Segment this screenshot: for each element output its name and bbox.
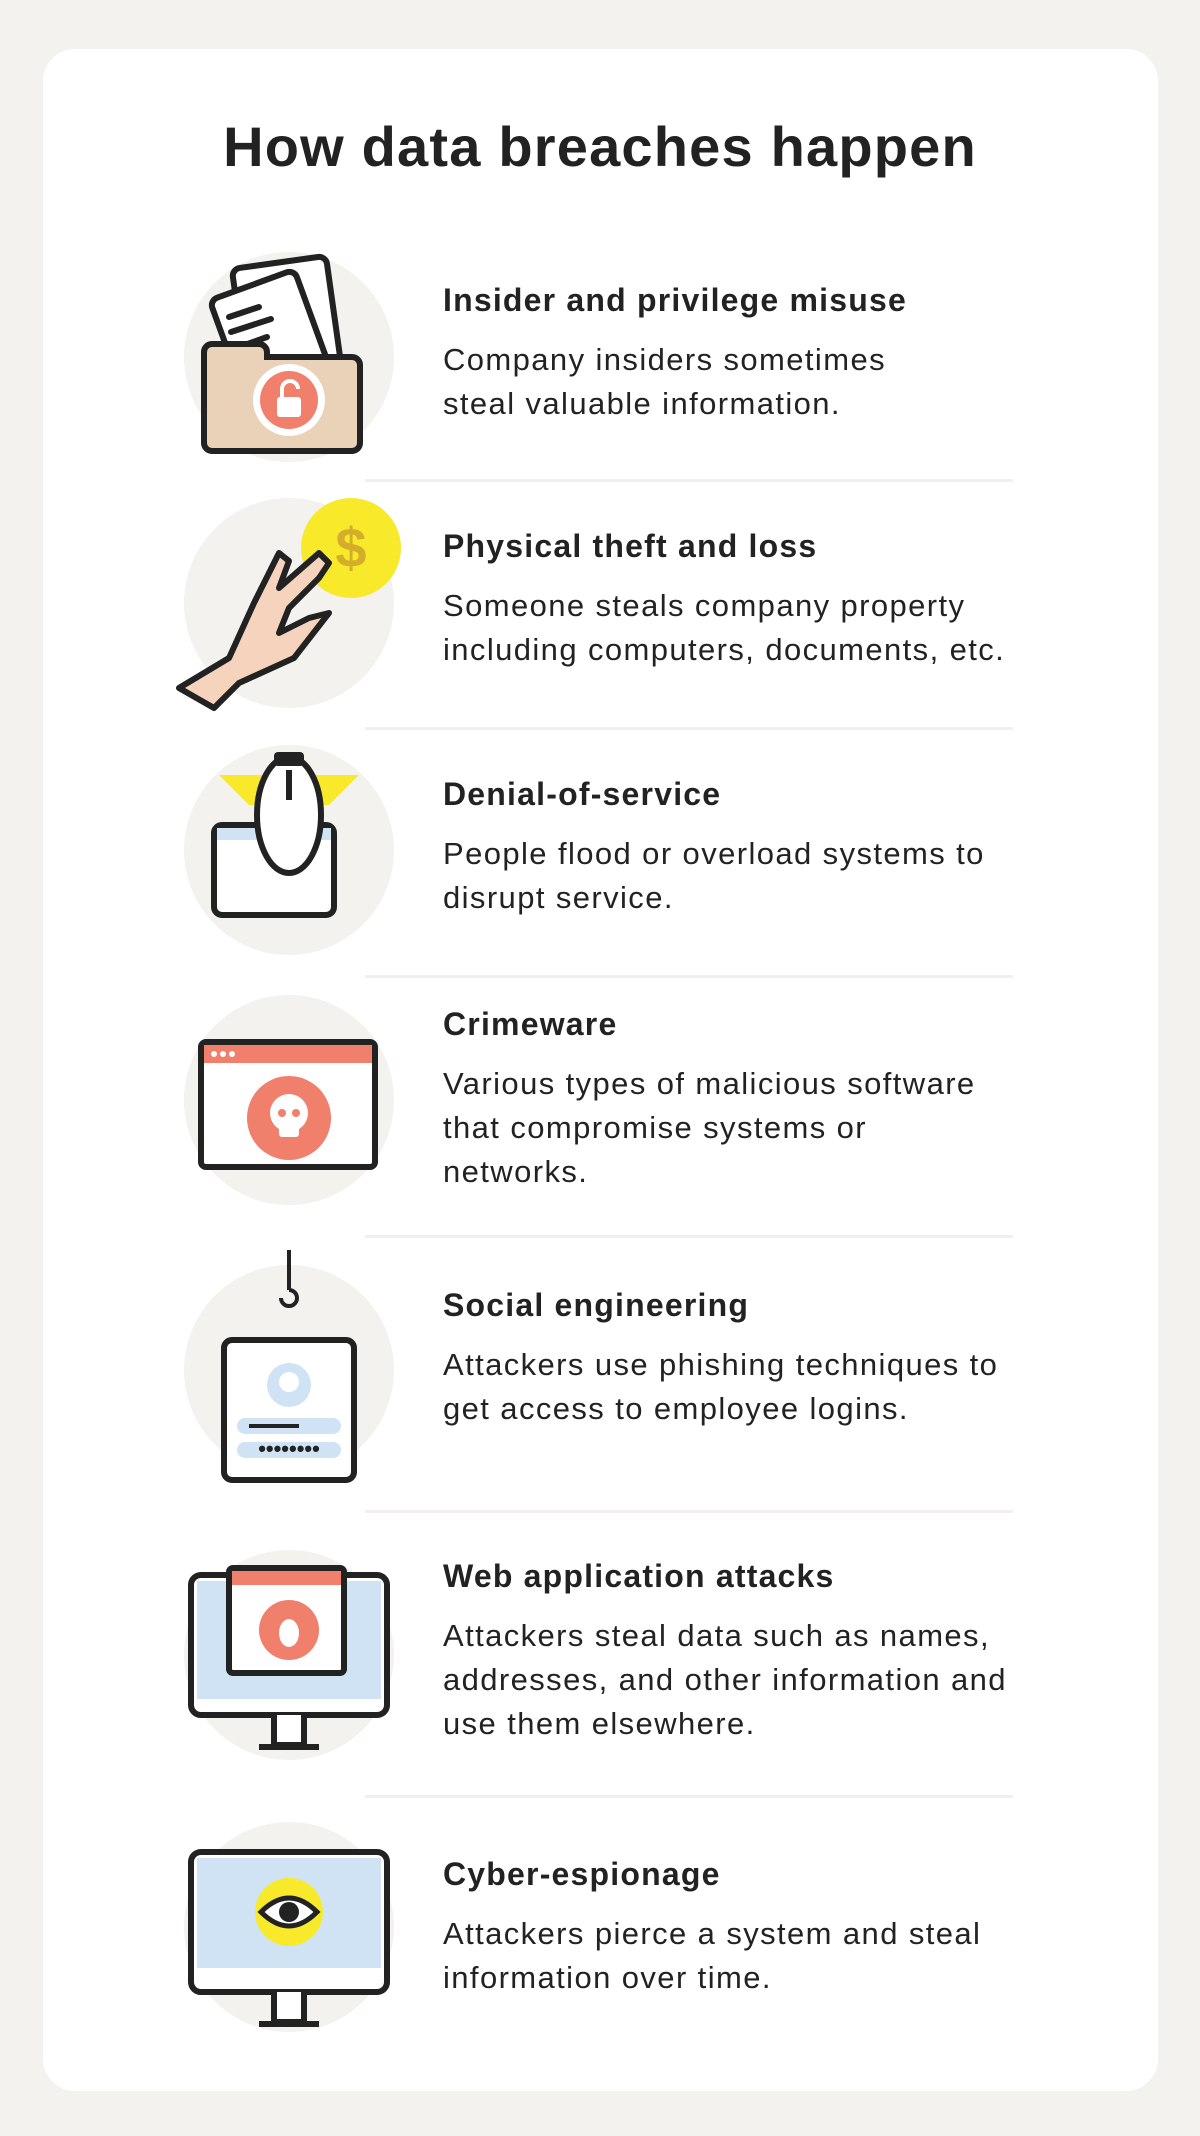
text: web: use them elsewhere. [443, 1706, 756, 1741]
text: dos: Denial-of-service [443, 776, 721, 812]
text: physical: including computers, documents, etc. [443, 632, 1005, 667]
icon: login card on hook [184, 1250, 394, 1483]
icon: hand with coin [176, 498, 401, 712]
text: crimeware: networks. [443, 1154, 588, 1189]
text: web: addresses, and other information and [443, 1662, 1007, 1697]
icon: login card on hook: •••••••• [258, 1436, 320, 1461]
text: physical: Physical theft and loss [443, 528, 817, 564]
text: espionage: Cyber-espionage [443, 1856, 721, 1892]
text: insider [443, 282, 907, 421]
text: crimeware: Various types of malicious software [443, 1066, 976, 1101]
text: crimeware: Crimeware [443, 1006, 617, 1042]
text: physical: Someone steals company property [443, 588, 965, 623]
text: social: Social engineering [443, 1287, 749, 1323]
icon: monitor with eye [184, 1822, 394, 2032]
text: dos: disrupt service. [443, 880, 674, 915]
icon: browser with skull [184, 995, 394, 1205]
text: dos: People flood or overload systems to [443, 836, 985, 871]
text: web: Web application attacks [443, 1558, 835, 1594]
icon: mouse on box [184, 745, 394, 955]
icon: folder with unlocked padlock [184, 252, 394, 462]
text: social: get access to employee logins. [443, 1391, 909, 1426]
icon: monitor with bug [184, 1550, 394, 1760]
text: social [443, 1287, 998, 1426]
icon: hand with coin: $ [335, 516, 367, 579]
text: crimeware: that compromise systems or [443, 1110, 867, 1145]
text: crimeware [443, 1006, 976, 1189]
title: How data breaches happen [223, 115, 977, 178]
text: physical [443, 528, 1005, 667]
text: insider: Insider and privilege misuse [443, 282, 907, 318]
text: web: Attackers steal data such as names, [443, 1618, 990, 1653]
text: espionage: Attackers pierce a system and steal [443, 1916, 981, 1951]
text: espionage [443, 1856, 981, 1995]
text: insider: steal valuable information. [443, 386, 841, 421]
text: social: Attackers use phishing techniques to [443, 1347, 998, 1382]
text: dos [443, 776, 985, 915]
text: web [443, 1558, 1007, 1741]
text: espionage: information over time. [443, 1960, 772, 1995]
text: insider: Company insiders sometimes [443, 342, 886, 377]
